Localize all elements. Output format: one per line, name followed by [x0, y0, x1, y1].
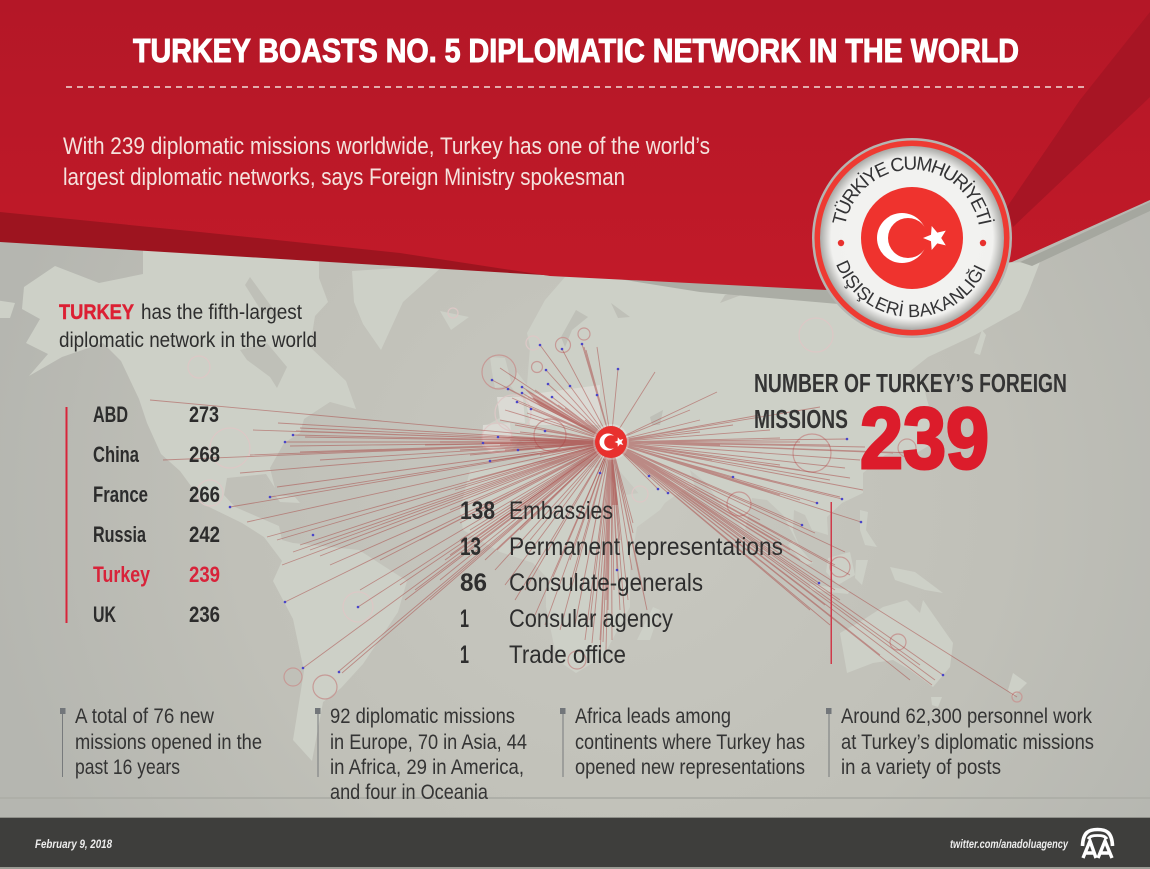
ranking table: [66, 402, 220, 627]
text: Turkey fifth-largest heading: has the fifth-largest: [141, 301, 302, 324]
fact: new missions: past 16 years: [75, 756, 180, 779]
ranking table: France: [93, 482, 148, 507]
text: Turkey fifth-largest heading: diplomatic network in the world: [59, 329, 317, 352]
ranking table: Russia: [93, 522, 147, 547]
ranking table: ABD: [93, 402, 128, 427]
fact: personnel: at Turkey’s diplomatic missions: [841, 731, 1094, 754]
ranking table: UK: [93, 602, 116, 627]
ranking table: Turkey: [93, 562, 151, 587]
intro text: With 239 diplomatic missions worldwide, Turkey has one of the world’s: [63, 133, 710, 160]
ranking table: 236: [189, 602, 220, 627]
panel: red header: [0, 0, 1150, 305]
mission type breakdown: 13: [460, 533, 481, 561]
map: connection lines from Ankara: [150, 344, 1017, 697]
ranking table: 268: [189, 442, 220, 467]
map: blue mission dots: [229, 343, 944, 676]
heading: number of foreign missions: MISSIONS: [754, 404, 848, 434]
intro text: [63, 133, 710, 191]
title: TURKEY BOASTS NO. 5 DIPLOMATIC NETWORK IN THE WORLD: [133, 32, 1019, 69]
fact: new missions: missions opened in the: [75, 731, 262, 754]
mission type breakdown: Consulate-generals: [509, 569, 703, 597]
mission type breakdown: Permanent representations: [509, 533, 783, 561]
icon: Anadolu Agency logo: [1082, 830, 1112, 858]
ranking table: China: [93, 442, 140, 467]
mission type breakdown: Embassies: [509, 497, 613, 525]
mission type breakdown: 1: [460, 641, 469, 669]
fact: missions by continent: in Europe, 70 in Asia, 44: [330, 731, 527, 754]
intro text: largest diplomatic networks, says Foreign Ministry spokesman: [63, 164, 625, 191]
title dashed divider: [66, 86, 1085, 88]
seas and lakes: [240, 277, 760, 425]
bottom faint line: [0, 797, 1150, 799]
footer bar: [0, 817, 1150, 869]
text: Turkey fifth-largest heading: TURKEY: [59, 301, 134, 324]
pale highlights over western Europe: [482, 385, 600, 452]
text: Turkey fifth-largest heading: [59, 301, 317, 352]
fact: Africa leads: opened new representations: [575, 756, 805, 779]
ranking table: 239: [189, 562, 220, 587]
mission type breakdown: 1: [460, 605, 469, 633]
fact: Africa leads: Africa leads among: [575, 705, 731, 728]
seal top lettering: TÜRKİYE CUMHURİYETİ: [832, 156, 995, 224]
mission type breakdown: Consular agency: [509, 605, 673, 633]
ranking table: 273: [189, 402, 219, 427]
fact: new missions: [60, 705, 262, 779]
map markers: consulate circles: [188, 308, 1022, 702]
date: February 9, 2018: [35, 839, 113, 851]
ranking table: 242: [189, 522, 220, 547]
fact: new missions: A total of 76 new: [75, 705, 215, 728]
icon: Foreign Ministry seal: [812, 138, 1012, 338]
mission type breakdown: 86: [460, 569, 487, 597]
big number 239: 239: [860, 391, 989, 487]
fact: Africa leads: continents where Turkey has: [575, 731, 805, 754]
mission type breakdown: Trade office: [509, 641, 626, 669]
heading: number of foreign missions: [754, 368, 1067, 487]
fact: missions by continent: [315, 705, 527, 804]
fact: missions by continent: in Africa, 29 in America,: [330, 756, 524, 779]
twitter handle: twitter.com/anadoluagency: [950, 839, 1068, 851]
fact: missions by continent: and four in Oceania: [330, 781, 488, 804]
fact: Africa leads: [560, 705, 805, 779]
seal bottom lettering: DIŞIŞLERİ BAKANLIĞI: [836, 260, 986, 318]
decorative red rule: [830, 502, 832, 664]
fact: personnel: Around 62,300 personnel work: [841, 705, 1092, 728]
ranking table: 266: [189, 482, 220, 507]
fact: personnel: [826, 705, 1094, 779]
icon: Ankara pin with Turkish flag: [593, 424, 629, 460]
world map continents: [0, 250, 1040, 761]
mission type breakdown: 138: [460, 497, 495, 525]
mission type breakdown: [460, 497, 783, 669]
fact: personnel: in a variety of posts: [841, 756, 1001, 779]
fact: missions by continent: 92 diplomatic missions: [330, 705, 515, 728]
